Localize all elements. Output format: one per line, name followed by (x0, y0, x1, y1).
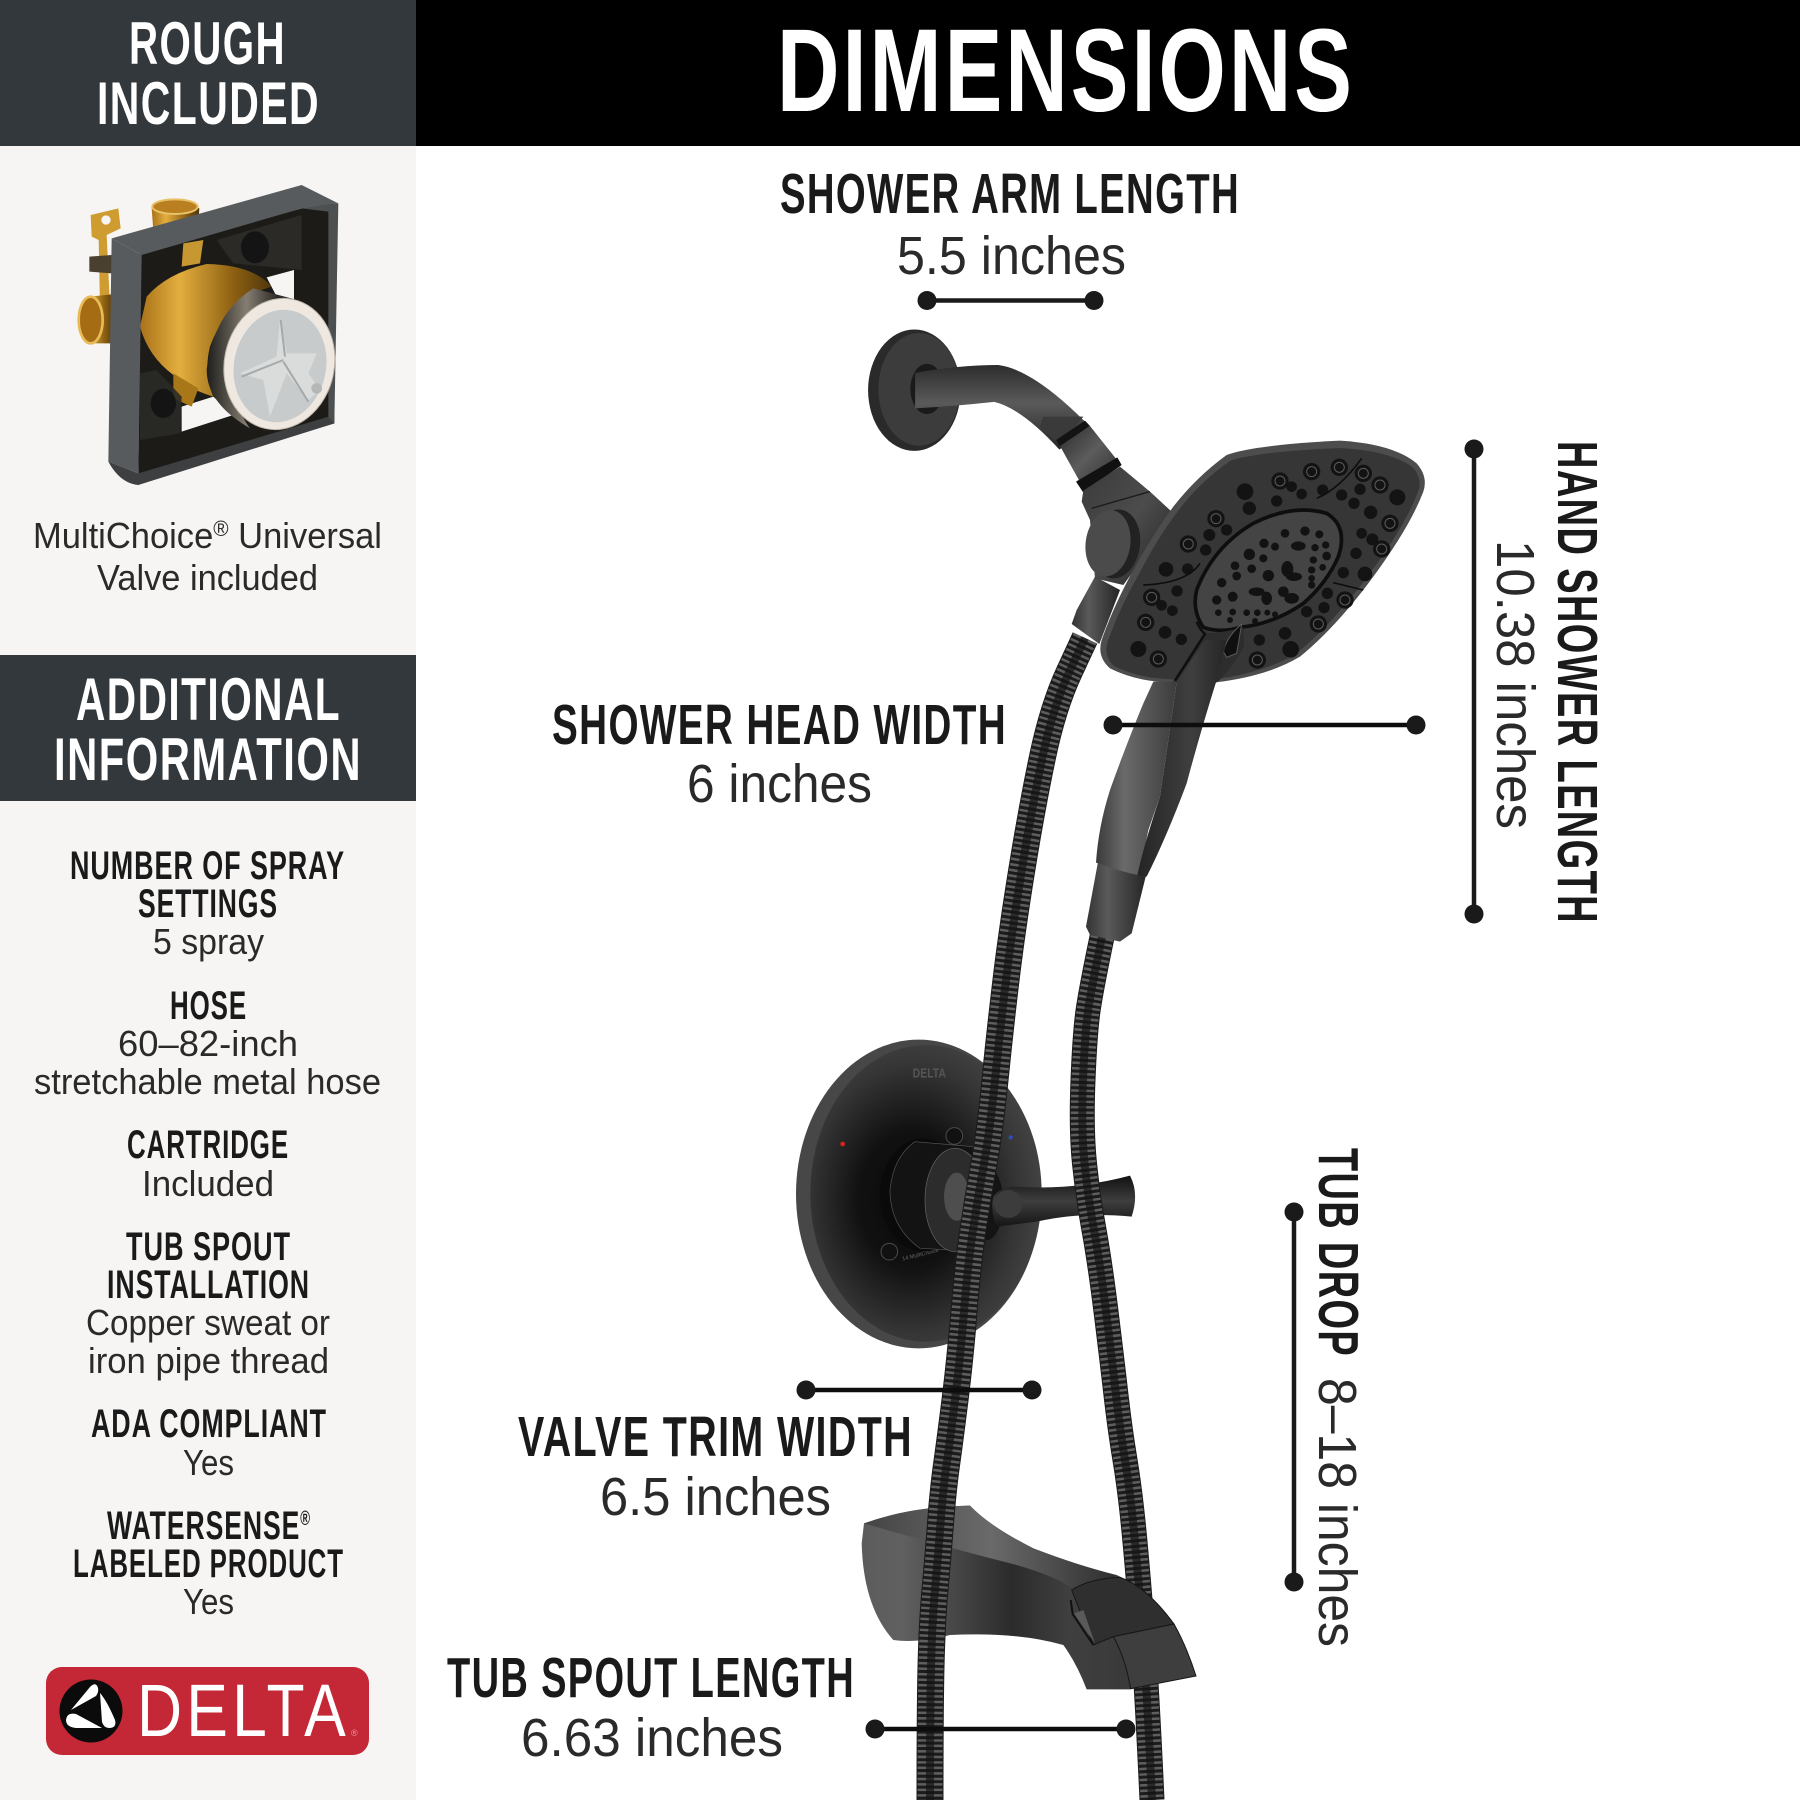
dimension: shower arm length: SHOWER ARM LENGTH (780, 162, 1240, 226)
dimension: tub drop (1284, 1148, 1370, 1647)
spec: number of spray settings: NUMBER OF SPRAY (70, 844, 345, 888)
spec: watersense: WATERSENSE (107, 1504, 398, 1548)
spec: tub spout installation: TUB SPOUT (126, 1225, 291, 1269)
shower arm (915, 365, 1089, 450)
handle tail (1086, 858, 1147, 942)
logo: delta: ® (351, 1728, 358, 1738)
spec: hose (34, 984, 381, 1102)
spec: watersense (73, 1504, 344, 1622)
spec: number of spray settings (70, 844, 345, 962)
hose: right (1082, 937, 1152, 1800)
dimension: tub spout length (447, 1646, 1136, 1768)
spec: watersense: LABELED PRODUCT (73, 1542, 344, 1586)
photo: valve trim plate and lever (796, 1040, 1135, 1348)
dimension: tub spout length: TUB SPOUT LENGTH (447, 1646, 855, 1710)
dimension: hand shower length: 10.38 inches (1485, 540, 1545, 829)
spec: ada compliant: ADA COMPLIANT (91, 1402, 327, 1446)
heading: additional information: INFORMATION (54, 726, 362, 793)
lever (992, 1176, 1135, 1227)
spec: tub spout installation (86, 1225, 330, 1381)
dimension: tub drop: TUB DROP (1306, 1148, 1370, 1357)
logo: delta: DELTA (137, 1669, 350, 1752)
caption: valve included: ® (213, 516, 229, 541)
dimension: valve trim width: VALVE TRIM WIDTH (518, 1405, 913, 1469)
caption: valve included: MultiChoice (33, 515, 224, 556)
swivel collar (1040, 417, 1122, 493)
heading: additional information: ADDITIONAL (76, 666, 341, 733)
dimension: hand shower length: HAND SHOWER LENGTH (1545, 441, 1609, 924)
hand shower neck (1172, 627, 1244, 683)
frame back walls (138, 203, 334, 483)
caption: valve included (33, 515, 382, 598)
dimension: tub spout length: 6.63 inches (521, 1708, 783, 1768)
dimension: hand shower length (1464, 440, 1609, 924)
metal collar (207, 288, 295, 428)
spec: tub spout installation: Copper sweat or (86, 1302, 330, 1343)
brass top fitting and bracket (89, 199, 199, 307)
outer spray nozzles (1130, 459, 1405, 669)
spec: watersense: ® (300, 1508, 311, 1530)
left sidebar panel (0, 0, 416, 1800)
spec: number of spray settings: 5 spray (153, 921, 265, 962)
diverter upper section (1072, 1577, 1174, 1645)
caption: valve included: Valve included (97, 557, 318, 598)
caption: valve included: Universal (229, 515, 382, 556)
dimension: tub drop: 8–18 inches (1307, 1378, 1367, 1647)
photo: swivel mount and shower head (1040, 417, 1425, 683)
left brass pipe (79, 294, 115, 343)
logo: delta (46, 1667, 369, 1755)
spec: ada compliant (91, 1402, 327, 1483)
dimension: valve trim width: 6.5 inches (600, 1467, 831, 1527)
dimension: shower head width (552, 693, 1426, 814)
heading: rough included: INCLUDED (97, 70, 320, 137)
dimension: valve trim width (518, 1380, 1042, 1527)
spout lip (1113, 1624, 1196, 1689)
spec: hose: 60–82-inch (118, 1023, 298, 1064)
spec: cartridge: Included (142, 1163, 274, 1204)
spec: number of spray settings: SETTINGS (138, 882, 278, 926)
spec: tub spout installation: iron pipe thread (88, 1340, 329, 1381)
handle light face (1096, 682, 1177, 875)
trim plate: 14 MultiChoice (902, 1248, 939, 1263)
lower mount tube (1072, 577, 1120, 644)
hose: left (930, 638, 1085, 1800)
chrome ring and cap (212, 288, 347, 440)
photo: wall flange and shower arm (868, 329, 1089, 451)
spray trigger (1223, 624, 1242, 657)
header band: dimensions (416, 0, 1800, 146)
spec: cartridge: CARTRIDGE (127, 1123, 289, 1167)
photo: rough-in valve (79, 185, 347, 485)
shower head (1100, 441, 1425, 683)
handle hub (880, 1138, 1003, 1252)
spout top face (864, 1506, 1117, 1589)
spec: tub spout installation: INSTALLATION (107, 1263, 310, 1307)
dimension: shower arm length: 5.5 inches (897, 226, 1126, 286)
frame front faces (108, 185, 338, 473)
screws (881, 1128, 963, 1260)
hand shower handle (1086, 640, 1227, 942)
dimension: shower arm length (780, 162, 1240, 310)
spec: watersense: Yes (183, 1581, 234, 1622)
heading: rough included: ROUGH (129, 10, 286, 77)
spec: hose: stretchable metal hose (34, 1061, 381, 1102)
trim plate (796, 1040, 1042, 1348)
title: DIMENSIONS (777, 5, 1355, 137)
brass valve body (140, 264, 272, 397)
heading: rough included (0, 0, 416, 146)
wall flange (868, 329, 961, 451)
spec: ada compliant: Yes (183, 1442, 234, 1483)
trim plate: DELTA (913, 1066, 946, 1080)
spec: hose: HOSE (170, 984, 247, 1028)
spec: cartridge (127, 1123, 289, 1204)
centre spray disc (1195, 510, 1341, 630)
spiral nozzle rings (1141, 462, 1395, 665)
mount block (1081, 467, 1172, 585)
mounting bosses (140, 231, 269, 440)
heading: additional information (0, 655, 416, 801)
photo: tub spout (862, 1506, 1196, 1689)
handle dark face (1137, 640, 1227, 877)
dimension: shower head width: SHOWER HEAD WIDTH (552, 693, 1007, 757)
dimension: shower head width: 6 inches (687, 754, 872, 814)
